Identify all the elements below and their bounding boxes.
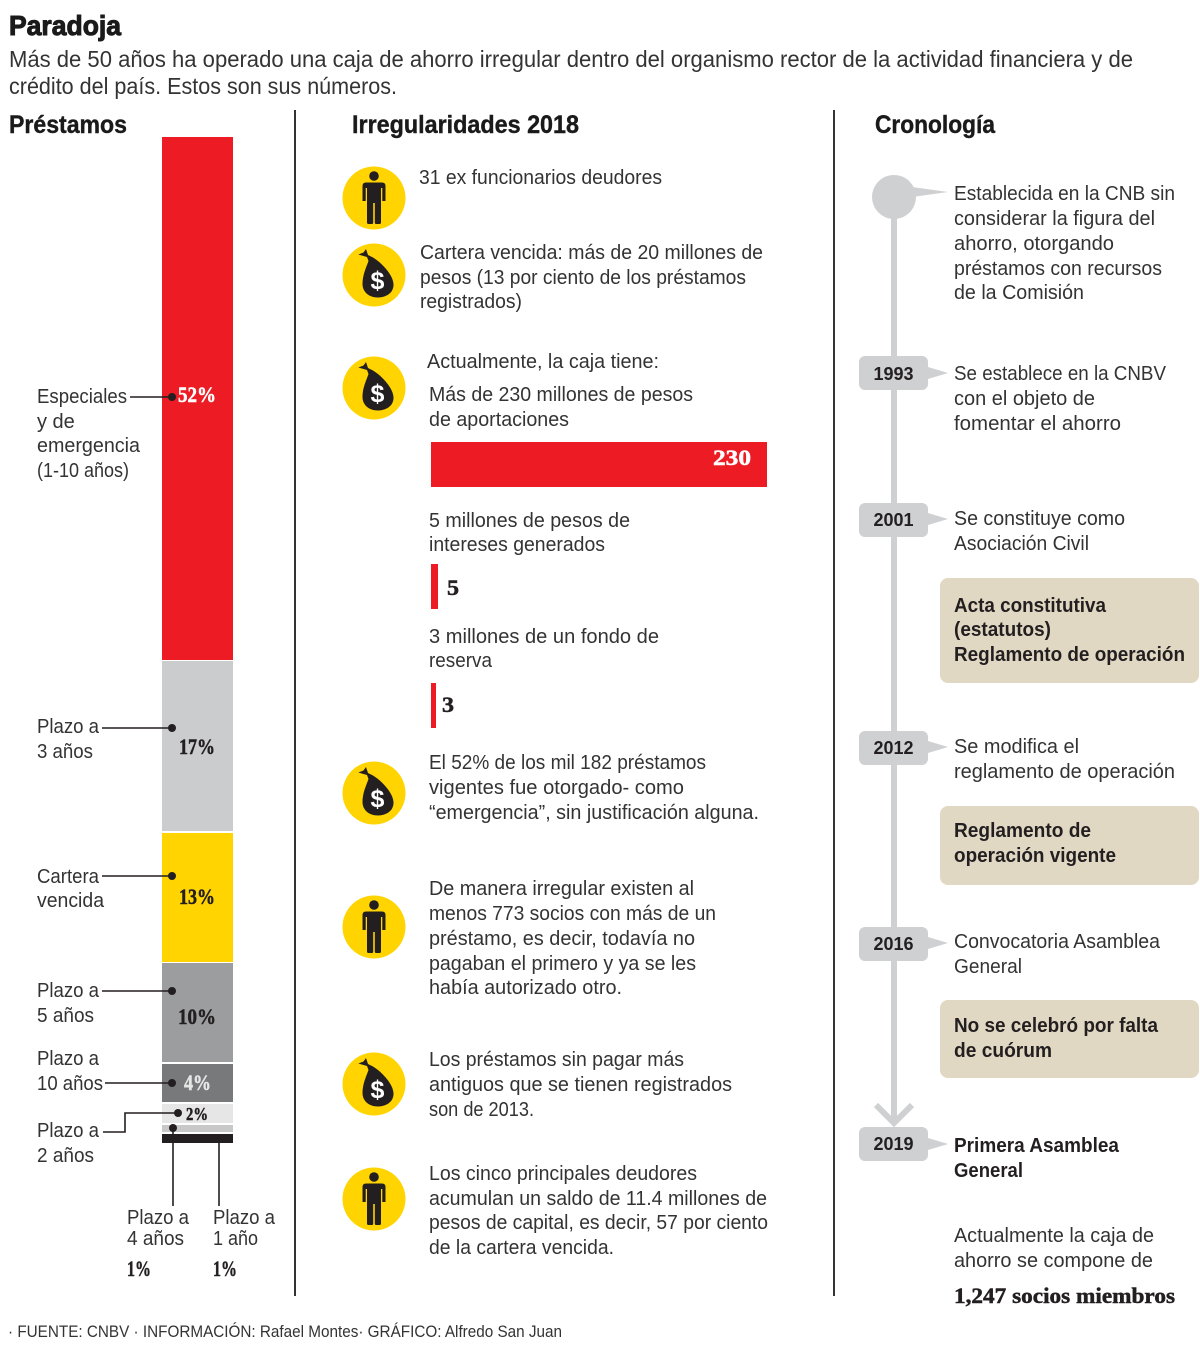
- text: cinco deudores: [429, 1163, 768, 1259]
- stacked bar chart: [162, 137, 233, 1143]
- text: 1993: fomentar el ahorro: [954, 413, 1121, 435]
- text: 5 millones: intereses generados: [429, 534, 605, 556]
- label: cartera vencida: [37, 866, 176, 912]
- label: especiales y de emergencia: [37, 386, 176, 482]
- timeline axis with arrow: [876, 210, 912, 1124]
- stacked bar chart: 52%: [178, 382, 216, 407]
- subtitle: Más de 50 años ha operado una caja de ahorro irregular dentro del organismo rector de la actividad financiera y de: [9, 46, 1133, 72]
- text: 2001: Asociación Civil: [954, 533, 1089, 555]
- text: cinco deudores: de la cartera vencida.: [429, 1237, 614, 1259]
- year 2019: 2019: [873, 1134, 914, 1154]
- label: plazo a 4 años: 1%: [127, 1256, 151, 1281]
- text: 1993: Se establece en la CNBV: [954, 363, 1167, 385]
- text: 5 millones: 5 millones de pesos de: [429, 510, 630, 532]
- icon: person 1: [342, 166, 406, 230]
- icon: money bag 3: [342, 762, 406, 824]
- subtitle: crédito del país. Estos son sus números.: [9, 73, 397, 99]
- year 2012: 2012: [873, 738, 914, 758]
- text: 773 socios: había autorizado otro.: [429, 977, 622, 999]
- text: 1993: con el objeto de: [954, 388, 1095, 410]
- year 2001: 2001: [873, 510, 914, 530]
- icon: money bag 4: $: [371, 1076, 385, 1104]
- icon: money bag 1: $: [371, 267, 385, 295]
- label: plazo a 2 años: Plazo a: [37, 1120, 100, 1142]
- icon: person 2: [342, 896, 406, 958]
- text: 2016: [954, 931, 1161, 978]
- label: plazo a 5 años: Plazo a: [37, 980, 100, 1002]
- text: establecida: préstamos con recursos: [954, 258, 1162, 280]
- year 1993: 1993: [873, 364, 914, 384]
- text: establecida: [954, 183, 1175, 304]
- label: especiales y de emergencia: emergencia: [37, 435, 141, 457]
- text: ex funcionarios: 31 ex funcionarios deudores: [419, 167, 662, 189]
- callout: no se celebró: de cuórum: [954, 1040, 1052, 1062]
- bar: 3: [431, 683, 454, 728]
- callout: no se celebró: [940, 1000, 1199, 1078]
- text: préstamos antiguos: antiguos que se tienen registrados: [429, 1074, 732, 1096]
- year 1993: [859, 356, 948, 390]
- label: plazo a 3 años: 3 años: [37, 741, 93, 763]
- text: 3 millones: 3 millones de un fondo de: [429, 626, 659, 648]
- timeline start marker: [872, 175, 948, 219]
- label: cartera vencida: vencida: [37, 890, 105, 912]
- text: 773 socios: [429, 878, 716, 999]
- text: 52 por ciento: vigentes fue otorgado- como: [429, 777, 684, 799]
- year 2012: [859, 731, 948, 765]
- label: plazo a 4 años: Plazo a: [127, 1207, 190, 1229]
- text: 2016: General: [954, 956, 1022, 978]
- year 2016: [859, 927, 948, 961]
- text: 2016: Convocatoria Asamblea: [954, 931, 1161, 953]
- callout: reglamento vigente: Reglamento de: [954, 820, 1091, 842]
- label: plazo a 2 años: 2 años: [37, 1145, 94, 1167]
- bar: 3: 3: [442, 692, 454, 717]
- subtitle: [9, 46, 1133, 99]
- label: plazo a 1 año: 1%: [213, 1256, 237, 1281]
- column divider right: [833, 110, 835, 1296]
- bar: 5: 5: [447, 575, 459, 600]
- panel: irregularidades: [342, 111, 768, 1259]
- label: especiales y de emergencia: y de: [37, 411, 75, 433]
- text: establecida: Establecida en la CNB sin: [954, 183, 1175, 205]
- bar: 5: [431, 564, 459, 609]
- label: plazo a 10 años: [37, 1048, 176, 1095]
- label: plazo a 3 años: [37, 716, 176, 763]
- text: 2012: reglamento de operación: [954, 761, 1175, 783]
- text: 3 millones: [429, 626, 659, 672]
- year 2001: [859, 503, 948, 537]
- text: 773 socios: menos 773 socios con más de un: [429, 903, 716, 925]
- column divider left: [294, 110, 296, 1296]
- heading: préstamos: Préstamos: [9, 111, 127, 139]
- callout: no se celebró: No se celebró por falta: [954, 1015, 1159, 1037]
- text: 230 millones: Más de 230 millones de pesos: [429, 384, 693, 406]
- label: plazo a 5 años: [37, 980, 176, 1027]
- text: actualmente socios: ahorro se compone de: [954, 1250, 1153, 1272]
- bar: 230: 230: [713, 445, 751, 470]
- label: plazo a 10 años: 10 años: [37, 1073, 103, 1095]
- label: plazo a 4 años: [127, 1124, 190, 1281]
- text: actualmente: Actualmente, la caja tiene:: [427, 351, 659, 373]
- label: especiales y de emergencia: Especiales: [37, 386, 127, 408]
- label: especiales y de emergencia: (1-10 años): [37, 460, 129, 482]
- label: plazo a 1 año: 1 año: [213, 1228, 258, 1250]
- text: cinco deudores: pesos de capital, es decir, 57 por ciento: [429, 1212, 768, 1234]
- callout: reglamento vigente: operación vigente: [954, 845, 1116, 867]
- text: cartera vencida: pesos (13 por ciento de los préstamos: [420, 267, 746, 289]
- label: cartera vencida: Cartera: [37, 866, 100, 888]
- icon: money bag 4: [342, 1052, 406, 1116]
- heading: cronología: Cronología: [875, 111, 996, 139]
- icon: money bag 2: [342, 356, 406, 420]
- text: 52 por ciento: [429, 752, 759, 824]
- icon: money bag 3: $: [371, 785, 385, 813]
- callout: reglamento vigente: [940, 806, 1199, 885]
- text: actualmente socios: Actualmente la caja de: [954, 1225, 1154, 1247]
- text: establecida: de la Comisión: [954, 282, 1084, 304]
- icon: money bag 1: [342, 244, 406, 306]
- text: préstamos antiguos: [429, 1049, 732, 1121]
- text: 230 millones: [429, 384, 693, 431]
- highlighted figure: socios: 1,247 socios miembros: [954, 1283, 1175, 1308]
- text: 773 socios: pagaban el primero y ya se les: [429, 953, 696, 975]
- text: establecida: considerar la figura del: [954, 208, 1155, 230]
- heading: irregularidades 2018: Irregularidades 2018: [352, 111, 579, 139]
- text: cinco deudores: acumulan un saldo de 11.4 millones de: [429, 1188, 767, 1210]
- text: préstamos antiguos: son de 2013.: [429, 1099, 534, 1121]
- text: cartera vencida: registrados): [420, 291, 522, 313]
- stacked bar chart: 4%: [184, 1070, 211, 1095]
- text: establecida: ahorro, otorgando: [954, 233, 1114, 255]
- callout: acta constitutiva: Reglamento de operación: [954, 644, 1185, 666]
- stacked bar chart: 10%: [178, 1004, 216, 1029]
- year 2019: [859, 1127, 948, 1161]
- text: 52 por ciento: El 52% de los mil 182 préstamos: [429, 752, 706, 774]
- text: actualmente socios: [954, 1225, 1154, 1272]
- label: plazo a 3 años: Plazo a: [37, 716, 100, 738]
- text: 5 millones: [429, 510, 630, 556]
- text: cartera vencida: [420, 242, 763, 313]
- stacked bar chart: 13%: [179, 884, 215, 909]
- text: 2019: Primera Asamblea: [954, 1135, 1120, 1157]
- callout: acta constitutiva: [940, 578, 1199, 683]
- text: 773 socios: préstamo, es decir, todavía no: [429, 928, 695, 950]
- text: 1993: [954, 363, 1167, 435]
- label: plazo a 1 año: Plazo a: [213, 1207, 276, 1229]
- year 2016: 2016: [873, 934, 914, 954]
- text: 2019: General: [954, 1160, 1023, 1182]
- text: 3 millones: reserva: [429, 650, 493, 672]
- text: 2012: Se modifica el: [954, 736, 1079, 758]
- callout: acta constitutiva: (estatutos): [954, 619, 1051, 641]
- label: plazo a 2 años: [37, 1109, 182, 1167]
- icon: person 3: [342, 1168, 406, 1230]
- label: plazo a 1 año: [213, 1140, 276, 1281]
- stacked bar chart: 17%: [179, 734, 215, 759]
- label: plazo a 10 años: Plazo a: [37, 1048, 100, 1070]
- text: préstamos antiguos: Los préstamos sin pagar más: [429, 1049, 684, 1071]
- stacked bar chart: 2%: [186, 1104, 208, 1124]
- icon: money bag 2: $: [371, 380, 385, 408]
- panel: cronología: [859, 111, 1199, 1308]
- text: 773 socios: De manera irregular existen al: [429, 878, 694, 900]
- panel: préstamos: [9, 111, 276, 1281]
- text: cartera vencida: Cartera vencida: más de 20 millones de: [420, 242, 763, 264]
- source line: · FUENTE: CNBV · INFORMACIÓN: Rafael Montes· GRÁFICO: Alfredo San Juan: [8, 1322, 562, 1341]
- text: 230 millones: de aportaciones: [429, 409, 569, 431]
- text: 2012: [954, 736, 1175, 783]
- label: plazo a 4 años: 4 años: [127, 1228, 184, 1250]
- text: 2001: Se constituye como: [954, 508, 1125, 530]
- callout: acta constitutiva: Acta constitutiva: [954, 595, 1107, 617]
- label: plazo a 5 años: 5 años: [37, 1005, 94, 1027]
- bar: 230: [431, 442, 767, 487]
- text: 52 por ciento: “emergencia”, sin justificación alguna.: [429, 802, 759, 824]
- title: Paradoja: [9, 10, 121, 41]
- text: 2001: [954, 508, 1125, 555]
- text: 2019: [954, 1135, 1120, 1182]
- text: cinco deudores: Los cinco principales deudores: [429, 1163, 697, 1185]
